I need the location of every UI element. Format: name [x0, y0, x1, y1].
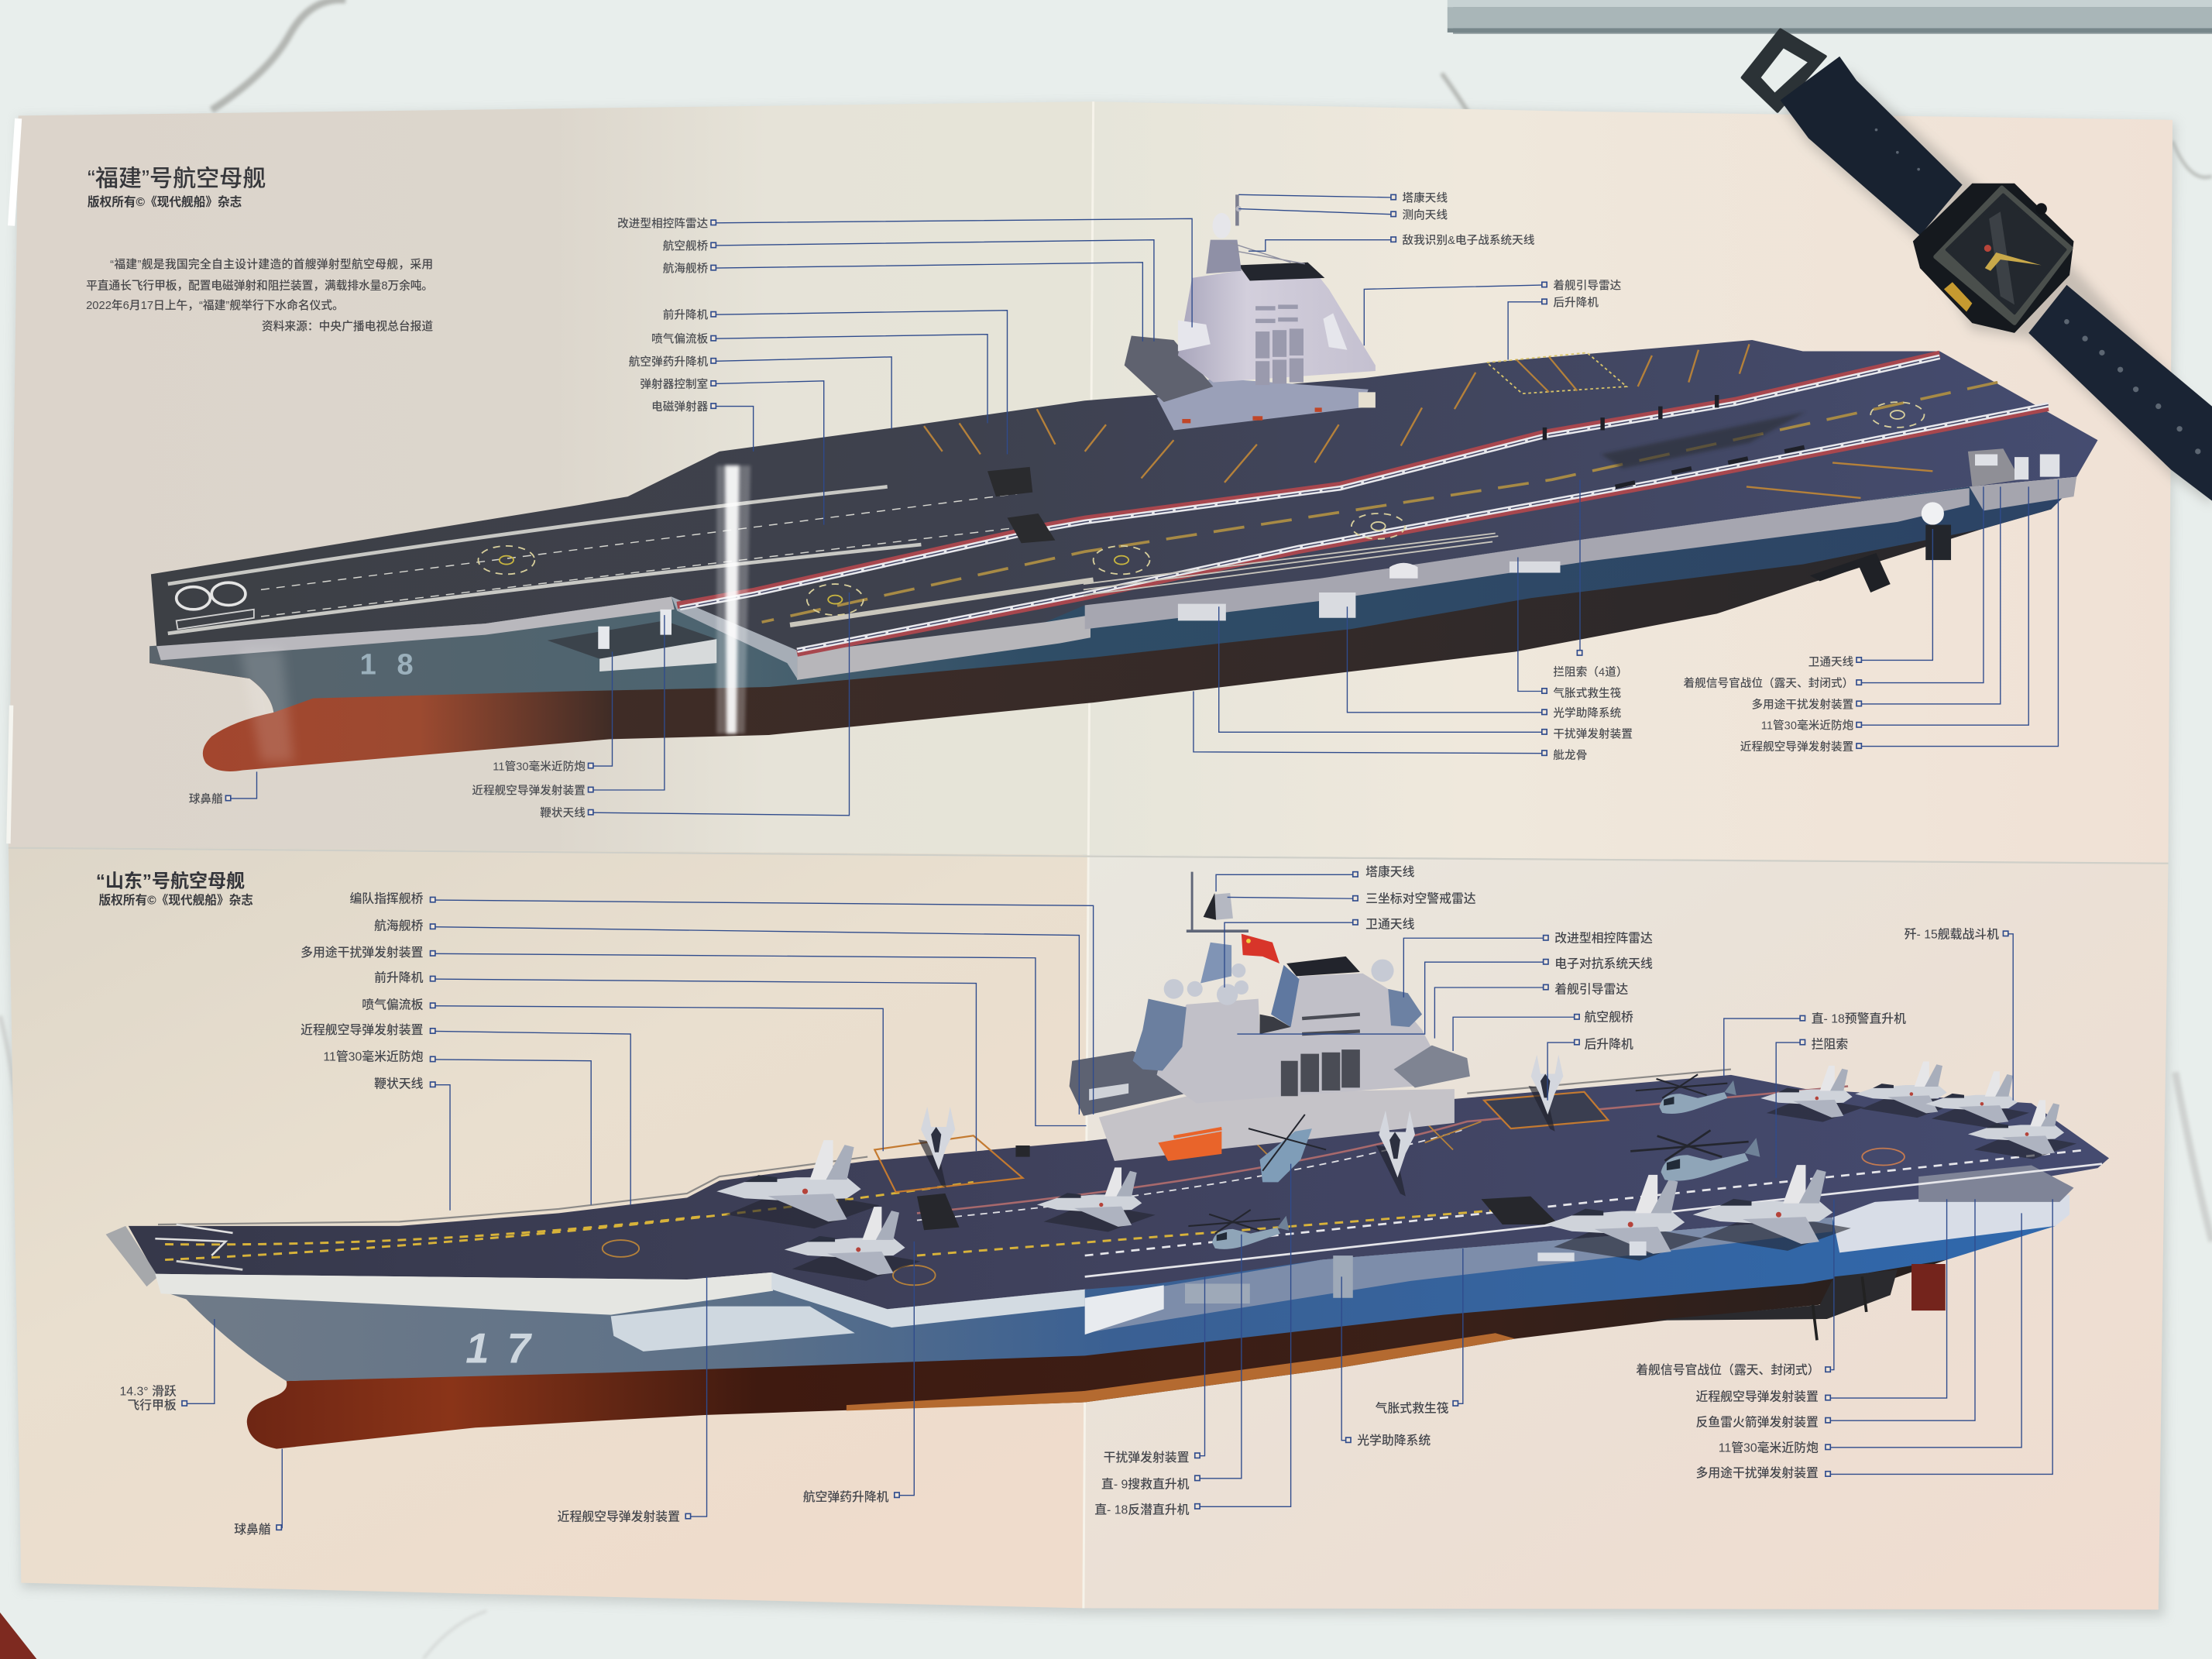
callout: 多用途干扰发射装置: 多用途干扰发射装置 — [1751, 697, 1853, 711]
callout: 航空弹药升降机: 航空弹药升降机 — [629, 355, 709, 369]
island main block — [1178, 263, 1376, 383]
Fujian underwater hull and bulbous bow — [149, 478, 2076, 771]
Shandong hull side — [161, 1199, 2069, 1381]
paper: upper-left panel — [9, 101, 1094, 855]
title: Shandong: “山东”号航空母舰 — [96, 871, 245, 892]
wristwatch — [1742, 29, 2212, 505]
callout: 塔康天线 Shandong: 塔康天线 — [1365, 864, 1415, 879]
callout: 多用途干扰弹发射装置 Shandong: 多用途干扰弹发射装置 — [301, 945, 424, 960]
callout: 改进型相控阵雷达: 改进型相控阵雷达 — [617, 217, 709, 230]
stern equipment and radome — [1178, 448, 2059, 620]
helicopter spots — [478, 402, 1924, 615]
callout: 前升降机 Shandong: 前升降机 — [374, 971, 424, 985]
callout: 舭龙骨 — [1194, 691, 1587, 762]
callout: 前升降机 — [663, 309, 1007, 454]
callout: 近程舰空导弹发射装置 Shandong stern: 近程舰空导弹发射装置 — [1696, 1389, 1819, 1404]
callout: 鞭状天线 Fujian — [540, 592, 849, 820]
callout: 拦阻索（4道） — [1553, 479, 1628, 678]
text block: Fujian introduction: “福建”舰是我国完全自主设计建造的首艘弹射型航空母舰，采用 — [110, 257, 433, 271]
callout: 着舰信号官战位 Fujian — [1684, 486, 1984, 690]
red object corner — [0, 1613, 36, 1659]
blast deflectors — [1544, 395, 1805, 486]
callout: 电磁弹射器: 电磁弹射器 — [651, 400, 709, 414]
Fujian flight deck — [151, 340, 2097, 653]
title: Fujian: “福建”号航空母舰 — [88, 166, 266, 191]
paper: lower-left panel — [9, 847, 1089, 1608]
callout: 喷气偏流板 Shandong — [362, 998, 883, 1151]
title: Fujian — [88, 166, 266, 209]
J-15 fighter group — [716, 1055, 2076, 1281]
callout: 前升降机 Shandong — [374, 971, 976, 1151]
callout: 航海舰桥 Shandong — [374, 918, 1079, 1115]
watch buckle — [1742, 29, 1826, 112]
callout: 着舰引导雷达 Fujian: 着舰引导雷达 — [1553, 279, 1622, 292]
callout: 多用途干扰弹发射装置 Shandong stern: 多用途干扰弹发射装置 — [1696, 1465, 1819, 1480]
callout: 航空弹药升降机 Shandong: 航空弹药升降机 — [803, 1489, 889, 1504]
helicopter Z-18 anti-submarine — [1249, 1115, 1326, 1182]
Fujian island superstructure — [1125, 194, 1376, 431]
callout: 喷气偏流板 — [651, 333, 988, 423]
callout: 光学助降系统 Fujian: 光学助降系统 — [1553, 706, 1622, 720]
island left sponson — [1125, 336, 1213, 402]
helicopter group — [1188, 1074, 1760, 1249]
callout: 舭龙骨: 舭龙骨 — [1553, 749, 1587, 762]
callout: 14.3° 滑跃飞行甲板: 飞行甲板 — [127, 1399, 177, 1413]
gold side plate — [1944, 282, 1972, 312]
Shandong island — [1070, 872, 1470, 1161]
rudder and propeller — [1650, 1264, 1946, 1340]
sponson window band — [1089, 1084, 1128, 1101]
callout: 后升降机 Shandong — [1547, 1037, 1633, 1101]
glare halo on folded paper — [716, 465, 750, 733]
callout: 近程舰空导弹发射装置 Fujian bow: 近程舰空导弹发射装置 — [472, 783, 586, 797]
callout: 卫通天线 Shandong — [1224, 918, 1415, 988]
mast — [1206, 194, 1305, 273]
callout: 近程舰空导弹发射装置 Shandong bow — [558, 1276, 707, 1524]
callout: 航空弹药升降机 — [629, 355, 891, 429]
right tower panel — [1388, 989, 1422, 1027]
callout: 航空舰桥: 航空舰桥 — [663, 239, 709, 252]
subtitle: copyright Shandong: 版权所有©《现代舰船》杂志 — [99, 893, 253, 908]
bow ramp edge — [106, 1226, 158, 1286]
callout: 反鱼雷火箭弹发射装置: 反鱼雷火箭弹发射装置 — [1696, 1414, 1819, 1429]
callout: 光学助降系统 Fujian — [1347, 606, 1622, 720]
callout: 航海舰桥 Shandong: 航海舰桥 — [374, 918, 424, 933]
callout: 球鼻艏 Fujian: 球鼻艏 — [189, 792, 223, 805]
island lower block — [1099, 1089, 1455, 1161]
paper: lower-right panel — [1084, 855, 2169, 1609]
callout: 近程舰空导弹发射装置 Shandong bow: 近程舰空导弹发射装置 — [558, 1510, 680, 1524]
callout: 近程舰空导弹发射装置 Shandong — [301, 1022, 630, 1205]
angled deck edge — [771, 1273, 1085, 1328]
callout: 近程舰空导弹发射装置 Shandong stern — [1696, 1199, 1947, 1404]
callout: 近程舰空导弹发射装置 Shandong: 近程舰空导弹发射装置 — [301, 1022, 424, 1037]
paper: upper-right panel — [1089, 101, 2172, 864]
callout: 弹射器控制室: 弹射器控制室 — [640, 377, 708, 391]
callout: 气胀式救生筏 Shandong: 气胀式救生筏 — [1376, 1401, 1449, 1415]
lower strap — [2028, 285, 2212, 501]
strap ventilation holes — [1875, 129, 2200, 454]
orange parking marks — [924, 344, 1932, 498]
callout: 后升降机 Fujian: 后升降机 — [1553, 296, 1599, 309]
callout: 球鼻艏 Fujian — [189, 771, 257, 805]
title: Shandong — [96, 871, 253, 908]
callout: 塔康天线 Fujian: 塔康天线 — [1403, 191, 1448, 204]
callout: 航海舰桥: 航海舰桥 — [663, 262, 709, 276]
right sponson — [1394, 1046, 1470, 1087]
hull number 17: 17 — [465, 1325, 532, 1372]
dark roof — [1286, 957, 1360, 976]
callout: 着舰信号官战位 Shandong — [1636, 1199, 1834, 1377]
callout: 14.3° 滑跃飞行甲板 — [119, 1319, 215, 1413]
callout: 前升降机: 前升降机 — [663, 309, 709, 322]
callout: 11管30毫米近防炮 Shandong — [323, 1049, 591, 1205]
bow sponson — [548, 610, 716, 672]
callout: 后升降机 Fujian — [1508, 296, 1599, 359]
callout: 光学助降系统 Shandong — [1341, 1276, 1431, 1448]
text block: Fujian introduction: 2022年6月17日上午，“福建”舰举行下水命名仪式。 — [86, 298, 344, 312]
callout: 改进型相控阵雷达 — [617, 217, 1192, 328]
callout: 着舰引导雷达 Shandong — [1434, 982, 1628, 1039]
callout: 鞭状天线 Shandong: 鞭状天线 — [374, 1077, 424, 1091]
callout: 11管30毫米近防炮 Shandong: 11管30毫米近防炮 — [323, 1049, 424, 1064]
radar panels — [1178, 320, 1211, 352]
ship: Shandong carrier — [106, 872, 2109, 1449]
Fujian gallery walkways — [156, 477, 2076, 680]
vent grids — [1255, 304, 1304, 385]
callout: 电子对抗系统天线 — [1237, 956, 1653, 1034]
callout: 多用途干扰弹发射装置 Shandong stern — [1696, 1199, 2052, 1480]
deck elevators — [874, 1092, 1608, 1230]
callout: 航空弹药升降机 Shandong — [803, 1242, 914, 1504]
callout: 拦阻索: 拦阻索 — [1812, 1037, 1848, 1051]
radomes — [1164, 960, 1394, 1005]
callout: 敌我识别 — [1249, 233, 1535, 251]
callout: 弹射器控制室 — [640, 377, 824, 525]
callout: 后升降机 Shandong: 后升降机 — [1584, 1037, 1633, 1051]
callout: 三坐标对空警戒雷达: 三坐标对空警戒雷达 — [1365, 891, 1476, 906]
callout: 球鼻艏 Shandong — [234, 1449, 282, 1537]
white bow band — [155, 1273, 773, 1315]
callout: 11管30毫米近防炮 Fujian bow: 11管30毫米近防炮 — [493, 760, 586, 774]
catapult tracks — [677, 354, 2049, 653]
island left sponson — [1070, 1051, 1194, 1116]
flag of China — [1242, 934, 1279, 963]
callout: 卫通天线 Shandong: 卫通天线 — [1365, 918, 1415, 932]
text block: Fujian introduction — [86, 257, 433, 333]
callout: 直-9搜救直升机: 直- 9搜救直升机 — [1101, 1478, 1190, 1492]
callout: 直-18反潜直升机 — [1094, 1164, 1291, 1516]
callout: 改进型相控阵雷达 Shandong: 改进型相控阵雷达 — [1554, 932, 1653, 946]
left tower radar face — [1133, 999, 1187, 1070]
glare on folded paper — [725, 465, 739, 733]
elevators — [988, 352, 1626, 543]
callout: 光学助降系统 Shandong: 光学助降系统 — [1357, 1433, 1431, 1448]
island dark roof panel — [1238, 263, 1324, 280]
Shandong flight deck — [129, 1075, 2109, 1309]
callout: 着舰引导雷达 Shandong: 着舰引导雷达 — [1554, 982, 1628, 996]
white curve start of gallery — [1085, 1285, 1164, 1334]
tow tractor orange — [1158, 1128, 1221, 1161]
watch shadow — [1781, 70, 2212, 505]
callout: 11管30毫米近防炮 Fujian stern — [1761, 486, 2028, 733]
island main body — [1157, 974, 1434, 1103]
subtitle: copyright Fujian: 版权所有©《现代舰船》杂志 — [88, 194, 242, 209]
callout: 拦阻索 — [1776, 1037, 1848, 1178]
mast — [1187, 872, 1249, 984]
ship: Fujian carrier — [149, 194, 2097, 771]
callout: 11管30毫米近防炮 Fujian stern: 11管30毫米近防炮 — [1761, 719, 1854, 733]
callout: 直-18预警直升机: 直- 18预警直升机 — [1812, 1012, 1906, 1026]
callout: 电子对抗系统天线: 电子对抗系统天线 — [1554, 957, 1653, 971]
callout: 喷气偏流板 Shandong: 喷气偏流板 — [362, 998, 424, 1012]
callout: 改进型相控阵雷达 Shandong — [1403, 932, 1653, 998]
metal ruler at top — [1448, 0, 2212, 34]
upper window band — [1302, 1015, 1360, 1034]
callout: 鞭状天线 Fujian: 鞭状天线 — [540, 807, 586, 820]
callout: 球鼻艏 Shandong: 球鼻艏 — [234, 1522, 271, 1537]
watch bezel — [1936, 187, 2071, 323]
Shandong red underwater hull — [247, 1242, 1947, 1449]
stern white block — [1832, 1195, 2069, 1252]
callout: 气胀式救生筏 Fujian — [1518, 557, 1621, 700]
deck edge railing — [158, 1070, 1731, 1224]
deck runway lines bow — [168, 486, 1017, 634]
upper strap — [1781, 57, 1963, 235]
hull number 18: 18 — [359, 648, 414, 682]
island base — [1157, 378, 1369, 431]
bow sponson details — [1185, 1242, 1647, 1304]
callout: 11管30毫米近防炮 Shandong stern — [1719, 1213, 2021, 1455]
callout: 气胀式救生筏 Shandong — [1376, 1249, 1463, 1415]
watch case — [1913, 184, 2074, 333]
callout: 歼-15舰载战斗机: 歼- 15舰载战斗机 — [1905, 927, 1999, 941]
watch dial — [1947, 194, 2066, 313]
dial red star — [1984, 245, 1991, 252]
callout: 电磁弹射器 — [651, 400, 754, 452]
orange bottom strip — [847, 1333, 1515, 1410]
callout: 14.3° 滑跃飞行甲板: 14.3° 滑跃 — [119, 1384, 177, 1398]
glare on bow hull — [240, 649, 294, 762]
callout: 航空舰桥 Shandong — [1453, 1010, 1633, 1051]
callout: 干扰弹发射装置 Fujian — [1219, 606, 1633, 741]
callout: 卫通天线 Fujian: 卫通天线 — [1808, 656, 1854, 669]
callout: 直-18反潜直升机: 直- 18反潜直升机 — [1094, 1503, 1190, 1516]
callout: 敌我识别: 敌我识别&电子战系统天线 — [1403, 233, 1535, 247]
forward tower panel — [1271, 965, 1300, 1027]
callout: 直-9搜救直升机 — [1101, 1235, 1242, 1492]
watch hands — [1985, 252, 2042, 271]
callout: 多用途干扰弹发射装置 Shandong — [301, 945, 1087, 1126]
callout: 航空舰桥 — [663, 239, 1154, 342]
base red lockers — [1182, 407, 1322, 423]
deck tractor — [1358, 392, 1376, 407]
deck dashes — [155, 1086, 2102, 1285]
watch crown — [2035, 203, 2047, 215]
callout: 测向天线: 测向天线 — [1403, 208, 1448, 222]
callout: 干扰弹发射装置 Shandong — [1104, 1276, 1205, 1465]
callout: 拦阻索（4道）: 拦阻索（4道） — [1553, 665, 1628, 678]
callout: 直-18预警直升机 — [1724, 1012, 1906, 1077]
callout: 卫通天线 Fujian — [1808, 529, 1932, 669]
Fujian hull side — [149, 486, 2073, 713]
side gallery — [1085, 1218, 1832, 1333]
dark wear patch — [1601, 412, 1805, 469]
callout: 11管30毫米近防炮 Fujian bow — [493, 652, 612, 774]
callout: 喷气偏流板: 喷气偏流板 — [651, 333, 709, 346]
callout: 着舰信号官战位 Fujian: 着舰信号官战位（露天、封闭式） — [1684, 676, 1853, 690]
text block: Fujian introduction: 平直通长飞行甲板，配置电磁弹射和阻拦装置，满载排水量8万余吨。 — [86, 278, 433, 292]
callout: 近程舰空导弹发射装置 Fujian bow — [472, 615, 665, 797]
callout: 编队指挥舰桥 — [349, 892, 1094, 1115]
callout: 着舰信号官战位 Shandong: 着舰信号官战位（露天、封闭式） — [1636, 1362, 1820, 1377]
callout: 航空舰桥 Shandong: 航空舰桥 — [1584, 1010, 1633, 1025]
callout: 三坐标对空警戒雷达 — [1228, 891, 1476, 906]
bow sponson white — [611, 1307, 855, 1352]
callout: 着舰引导雷达 Fujian — [1364, 279, 1622, 345]
window grid — [1281, 1049, 1360, 1096]
deck centre line — [762, 383, 1997, 622]
callout: 近程舰空导弹发射装置 Fujian stern: 近程舰空导弹发射装置 — [1740, 740, 1853, 754]
callout: 11管30毫米近防炮 Shandong stern: 11管30毫米近防炮 — [1719, 1440, 1819, 1455]
callout: 干扰弹发射装置 Shandong: 干扰弹发射装置 — [1104, 1451, 1190, 1465]
stern equipment — [1918, 1165, 2074, 1202]
callout: 塔康天线 Fujian — [1238, 191, 1448, 204]
callout: 反鱼雷火箭弹发射装置 — [1696, 1199, 1975, 1429]
text block: Fujian introduction: 资料来源：中央广播电视总台报道 — [262, 319, 433, 333]
callout: 近程舰空导弹发射装置 Fujian stern — [1740, 479, 2058, 754]
dial carrier image — [1989, 211, 2014, 304]
callout: 干扰弹发射装置 Fujian: 干扰弹发射装置 — [1553, 728, 1633, 741]
callout: 塔康天线 Shandong — [1216, 864, 1415, 891]
callout: 编队指挥舰桥: 编队指挥舰桥 — [349, 892, 424, 906]
aft deck notch — [1260, 1015, 1291, 1034]
callout: 多用途干扰发射装置 — [1751, 486, 2001, 711]
callout: 测向天线 — [1238, 208, 1448, 222]
callout: 气胀式救生筏 Fujian: 气胀式救生筏 — [1553, 686, 1621, 700]
callout: 鞭状天线 Shandong — [374, 1077, 450, 1211]
callout: 歼-15舰载战斗机 — [1905, 927, 2013, 1101]
callout: 航海舰桥 — [663, 262, 1142, 342]
